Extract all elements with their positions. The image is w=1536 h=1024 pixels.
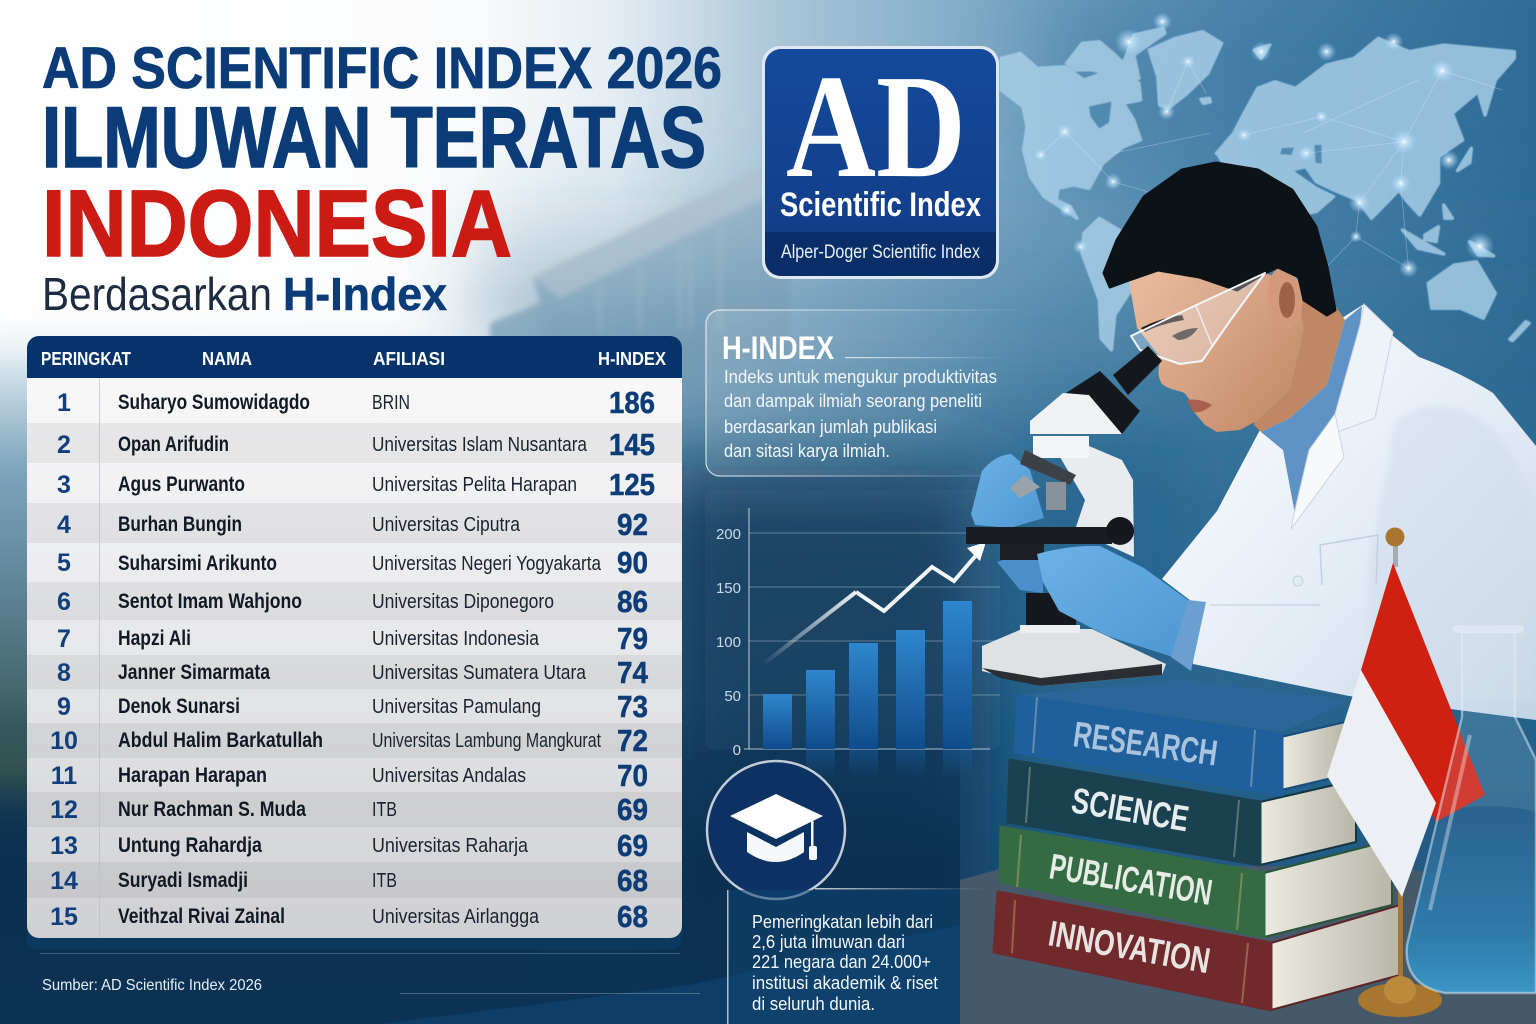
panel: H-Index definition: H-INDEX [722,330,835,366]
row 4: 92 [617,507,648,542]
row 15: Veithzal Rivai Zainal [118,905,285,928]
row 1: BRIN [372,392,410,414]
row 7: Hapzi Ali [118,627,191,650]
logo badge: Alper-Doger Scientific Index [781,242,980,263]
subtitle: Berdasarkan H-Index: H-Index [283,268,447,320]
row 10: 72 [617,723,648,758]
row 2: 2 [57,431,71,459]
flask glass [1407,625,1536,993]
row 13: 69 [617,828,648,863]
world map [1001,12,1529,350]
eyebrow [1141,315,1184,332]
row 13: 13 [50,832,78,860]
row 10 [50,723,648,758]
bar and line chart [705,490,1000,778]
row 13: Universitas Raharja [372,835,529,857]
title: Indonesia: INDONESIA [42,171,512,277]
row 4: Universitas Ciputra [372,514,521,536]
book: Publication [1000,827,1392,937]
microscope [966,346,1166,686]
row 10: Universitas Lambung Mangkurat [372,730,601,752]
shirt [1261,306,1362,514]
lab coat [1162,304,1536,720]
table header [41,349,666,369]
row 9: Universitas Pamulang [372,696,541,718]
coat collar [1291,304,1393,529]
row 3: Agus Purwanto [118,473,245,496]
panel: H-Index definition: dan dampak ilmiah seorang peneliti [724,391,982,411]
row 10: Abdul Halim Barkatullah [118,729,323,752]
table header: PERINGKAT [41,349,131,369]
row 14 [50,863,648,898]
face [1129,270,1304,432]
row 6: Sentot Imam Wahjono [118,590,302,613]
bar and line chart: 50 [724,688,741,705]
row 14: ITB [372,870,397,892]
title: Ilmuwan Teratas: ILMUWAN TERATAS [42,90,706,186]
ranking table [27,336,682,950]
row 8 [57,655,649,690]
row 6 [57,584,648,619]
logo badge [762,45,999,279]
row 1: Suharyo Sumowidagdo [118,391,310,414]
row 12: Nur Rachman S. Muda [118,798,306,821]
row 9: 73 [617,689,648,724]
row 4 [57,507,648,542]
panel: ranking coverage note: Pemeringkatan lebih dari [752,912,933,932]
panel: H-Index definition: Indeks untuk mengukur produktivitas [724,367,997,387]
row 3: 3 [57,471,71,499]
row 1 [57,385,655,420]
background building [490,167,790,420]
book stack [994,680,1400,1010]
panel: H-Index definition: dan sitasi karya ilmiah. [724,441,890,461]
row 15 [50,899,648,934]
source note: Sumber: AD Scientific Index 2026 [42,977,262,994]
logo badge: AD [786,45,966,209]
book: Innovation: INNOVATION [1046,913,1213,981]
row 12 [50,792,648,827]
row 11 [51,758,648,793]
ear [1265,265,1305,331]
panel: H-Index definition [706,310,1041,476]
book: Research [1015,680,1350,795]
book: Publication: PUBLICATION [1047,845,1215,913]
row 11: 70 [617,758,648,793]
logo badge: Scientific Index [780,186,981,224]
desk surface [960,866,1536,1024]
right glove [1037,546,1206,671]
left glove [971,454,1044,593]
row 3: Universitas Pelita Harapan [372,474,577,496]
row 7: 79 [617,621,648,656]
row 14: 14 [50,867,78,895]
row 2: Universitas Islam Nusantara [372,434,588,456]
row 15: 15 [50,903,78,931]
row 1: 186 [609,385,655,420]
row 10: 10 [50,727,78,755]
bar and line chart: 200 [716,526,741,543]
row 7 [57,621,648,656]
row 7: Universitas Indonesia [372,628,540,650]
row 9: Denok Sunarsi [118,695,240,718]
trend arrow [762,542,986,665]
row 13 [50,828,648,863]
book: Science: SCIENCE [1069,779,1192,839]
row 4: 4 [57,511,71,539]
neck [1250,300,1345,432]
row 15: 68 [617,899,648,934]
row 9 [57,689,648,724]
row 1: 1 [57,389,71,417]
subtitle: Berdasarkan H-Index [42,268,447,320]
row 15: Universitas Airlangga [372,906,540,928]
row 8: Universitas Sumatera Utara [372,662,587,684]
row 14: Suryadi Ismadji [118,869,248,892]
row 5: Suharsimi Arikunto [118,552,277,575]
row 12: 12 [50,796,78,824]
graduation cap badge [707,761,845,899]
table header: AFILIASI [373,349,445,369]
bar and line chart: 150 [716,580,741,597]
row 8: 74 [617,655,649,690]
row 6: Universitas Diponegoro [372,591,554,613]
row 3: 125 [609,467,655,502]
panel: ranking coverage note: institusi akademik & riset [752,973,938,993]
row 11: Harapan Harapan [118,764,267,787]
row 5: Universitas Negeri Yogyakarta [372,553,602,575]
row 5 [57,545,648,580]
book: Innovation [994,892,1400,1010]
bar and line chart: 0 [733,742,741,759]
Indonesian flag [1327,528,1485,1017]
panel: H-Index definition: berdasarkan jumlah publikasi [724,417,937,437]
scientist [1104,163,1536,720]
row 11: 11 [51,762,77,790]
eye [1172,328,1198,340]
goggles [1131,273,1265,364]
row 13: Untung Rahardja [118,834,262,857]
lips [1187,400,1212,412]
row 2: Opan Arifudin [118,433,229,456]
panel: ranking coverage note [727,888,985,1024]
row 5: 5 [57,549,71,577]
title: AD Scientific Index 2026: AD SCIENTIFIC INDEX 2026 [42,36,722,101]
row 12: ITB [372,799,397,821]
row 11: Universitas Andalas [372,765,526,787]
panel: ranking coverage note: di seluruh dunia. [752,994,875,1014]
table header: H-INDEX [598,349,666,369]
subtitle: Berdasarkan H-Index: Berdasarkan [42,268,272,320]
row 2: 145 [609,427,655,462]
hair [1104,163,1335,315]
row 9: 9 [57,693,71,721]
row 7: 7 [57,625,71,653]
row 6: 6 [57,588,71,616]
row 8: Janner Simarmata [118,661,270,684]
table header: NAMA [202,349,252,369]
bar and line chart: 100 [716,634,741,651]
row 5: 90 [617,545,648,580]
row 6: 86 [617,584,648,619]
panel: ranking coverage note: 221 negara dan 24.000+ [752,952,931,972]
row 4: Burhan Bungin [118,513,242,536]
row 3 [57,467,655,502]
book: Science [1008,760,1356,865]
row 8: 8 [57,659,71,687]
row 14: 68 [617,863,648,898]
row 12: 69 [617,792,648,827]
flask liquid [1406,806,1536,993]
book: Research: RESEARCH [1071,713,1220,774]
row 2 [57,427,655,462]
panel: ranking coverage note: 2,6 juta ilmuwan dari [752,932,905,952]
